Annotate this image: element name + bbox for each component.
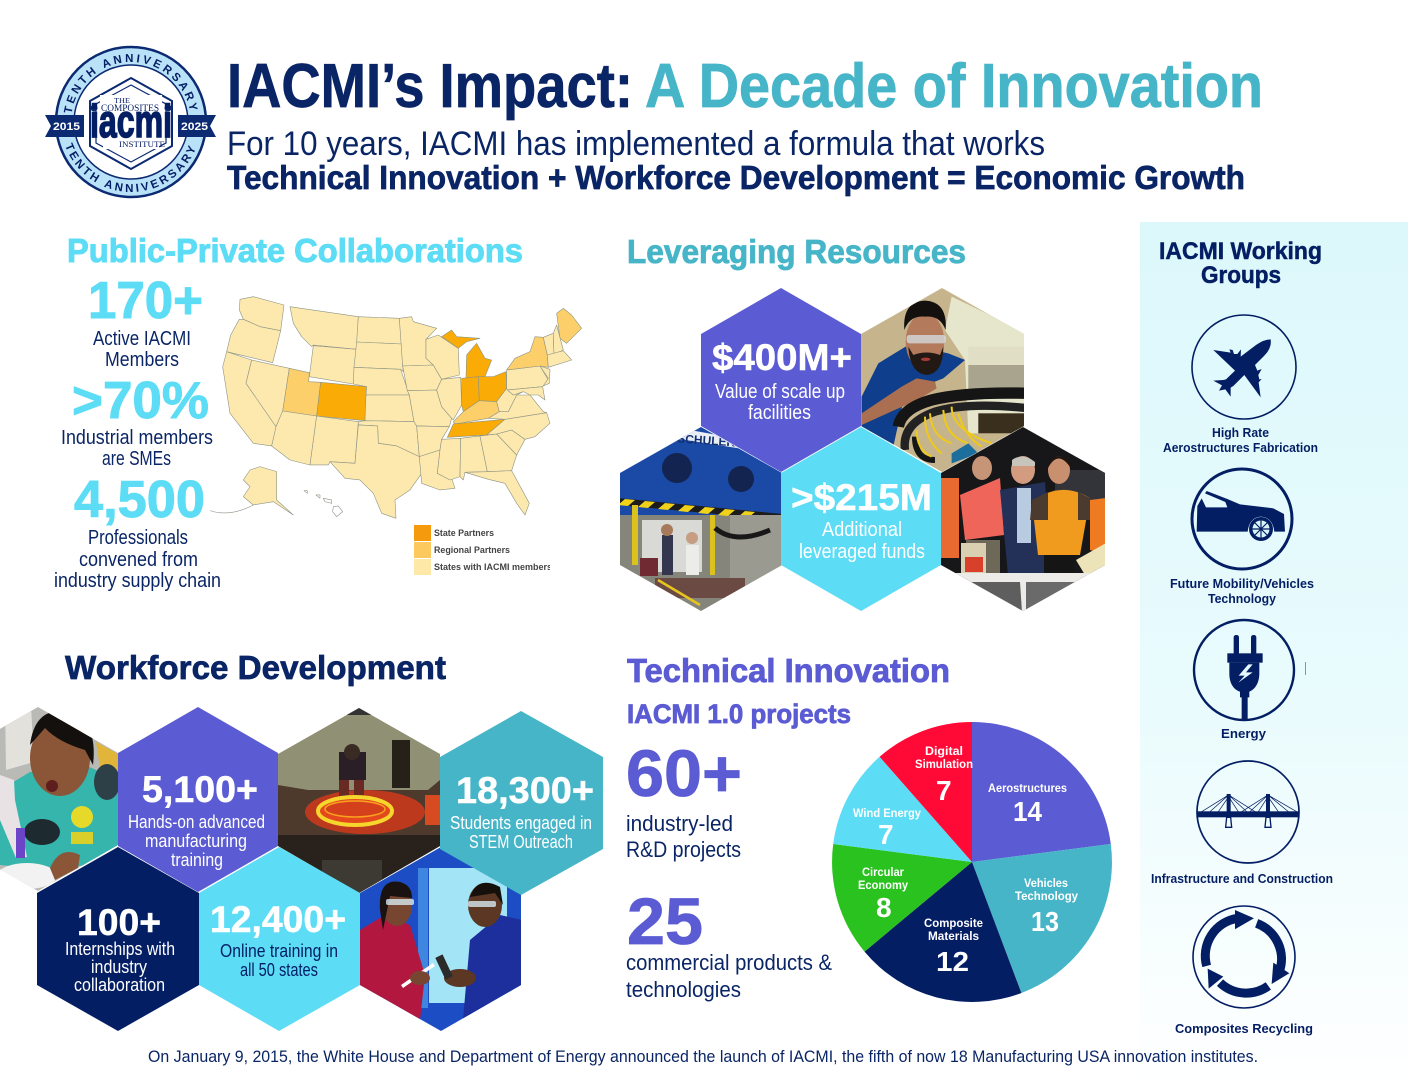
hexagon: 100+ internships: 100+ [77, 902, 161, 943]
stat: commercial products: commercial products & [626, 950, 832, 975]
logo: tenth anniversary badge: THE [114, 96, 130, 105]
title: IACMI’s Impact: [227, 52, 633, 121]
stat: active members: Members [105, 349, 179, 371]
pie chart: projects by area: Economy [858, 880, 909, 892]
hexagon: 12,400+ online training: Online training in [220, 941, 338, 961]
stat: R&D projects: 60+ [626, 736, 742, 810]
hexagon: 100+ internships: industry [91, 957, 147, 977]
hexagon: >$215M additional funds: >$215M [791, 477, 932, 518]
pie chart: projects by area: Digital [925, 746, 963, 758]
subtitle [227, 125, 1245, 196]
title [227, 52, 1263, 121]
hexagon: 12,400+ online training: 12,400+ [210, 899, 346, 940]
heading: Leveraging Resources [627, 233, 966, 270]
stat: active members: Active IACMI [93, 328, 191, 350]
map legend: States with IACMI members [434, 562, 552, 572]
map legend: State Partners [434, 528, 494, 538]
pie chart: projects by area: Vehicles [1024, 878, 1068, 890]
hexagon: 18,300+ STEM outreach [440, 711, 603, 895]
photo: press machine: SCHULER [677, 431, 736, 449]
logo: tenth anniversary badge: COMPOSITES [101, 103, 159, 113]
hexagon: 5,100+ hands-on training: 5,100+ [142, 769, 258, 810]
label: aerostructures [1163, 425, 1318, 455]
heading: IACMI Working [1159, 238, 1322, 265]
icon: bridge [1197, 761, 1299, 863]
title: A Decade of Innovation [645, 52, 1263, 121]
hexagon: 5,100+ hands-on training: training [171, 850, 223, 870]
hexagon: 18,300+ STEM outreach: STEM Outreach [469, 832, 573, 852]
panel: leveraging resources [618, 233, 1107, 613]
hexagon: 100+ internships: collaboration [74, 975, 165, 995]
footer note: On January 9, 2015, the White House and Department of Energy announced the launch of IACMI, the fifth of now 18 Manufacturing USA innovation institutes. [148, 1048, 1258, 1066]
pie chart: projects by area: Technology [1015, 891, 1079, 903]
pie chart: projects by area: Materials [928, 931, 979, 943]
stat: SMEs [61, 372, 213, 470]
pie chart: projects by area: 8 [876, 892, 892, 923]
subtitle: For 10 years, IACMI has implemented a formula that works [227, 125, 1045, 163]
photo: boy in science activity [0, 705, 120, 893]
hexagon: >$215M additional funds: Additional [822, 519, 902, 541]
hexagon: 5,100+ hands-on training: manufacturing [145, 831, 247, 851]
label: energy: Energy [1221, 726, 1267, 741]
pie chart: projects by area: 12 [936, 946, 969, 977]
pie chart: projects by area: Aerostructures [988, 783, 1067, 795]
heading: Public-Private Collaborations [67, 232, 523, 269]
stat: commercial products [626, 884, 832, 1002]
hexagon: $400M+ scale up facilities [701, 288, 861, 472]
photo: press machine [620, 427, 782, 611]
map of US partner states [210, 297, 582, 518]
label: mobility: Technology [1208, 591, 1277, 606]
hexagon: 18,300+ STEM outreach: Students engaged in [450, 813, 592, 833]
hexagon: 100+ internships: Internships with [65, 939, 175, 959]
stat: active members: 170+ [88, 272, 203, 330]
photo: glowing forged ring [276, 706, 442, 896]
hexagon: >$215M additional funds: leveraged funds [799, 541, 925, 563]
stat: professionals: industry supply chain [54, 570, 221, 592]
pie chart: projects by area: 7 [878, 819, 894, 850]
stat: professionals: Professionals [88, 527, 188, 549]
hexagon: $400M+ scale up facilities: Value of scale up [715, 381, 845, 403]
map legend [414, 525, 552, 575]
pie chart: projects by area: 7 [936, 775, 952, 806]
stat: SMEs: >70% [72, 372, 209, 430]
logo: tenth anniversary badge: TENTH ANNIVERSARY [64, 54, 198, 112]
panel: technical innovation [626, 652, 1112, 1002]
logo: tenth anniversary badge: INSTITUTE [119, 139, 165, 149]
panel: public-private collaborations [54, 232, 582, 592]
icon: airplane [1192, 315, 1296, 419]
label: mobility [1170, 576, 1314, 606]
photo: engineer with robot [858, 287, 1028, 473]
pie chart: projects by area: Simulation [915, 759, 973, 771]
pie chart: projects by area: Wind Energy [853, 808, 922, 820]
stat: R&D projects: R&D projects [626, 837, 741, 862]
heading: Workforce Development [65, 649, 446, 686]
label: mobility: Future Mobility/Vehicles [1170, 576, 1314, 591]
subtitle: Technical Innovation + Workforce Development = Economic Growth [227, 159, 1245, 196]
stat: commercial products: technologies [626, 977, 741, 1002]
photo: students in lab [358, 845, 523, 1033]
stat: active members [88, 272, 203, 371]
stat: R&D projects: industry-led [626, 811, 733, 836]
panel: workforce development [0, 649, 603, 1033]
hexagon: >$215M additional funds [781, 427, 941, 611]
logo: tenth anniversary badge [45, 46, 216, 198]
pie chart: projects by area: 13 [1031, 906, 1059, 937]
sidebar background [1140, 222, 1408, 1088]
stat: commercial products: 25 [627, 884, 703, 958]
heading: Technical Innovation [627, 652, 950, 689]
heading [1159, 238, 1322, 289]
pie chart: projects by area [832, 722, 1112, 1002]
label: infrastructure: Infrastructure and Construction [1151, 871, 1333, 886]
logo: tenth anniversary badge: 2015 [53, 121, 80, 133]
hexagon: 5,100+ hands-on training: Hands-on advanced [128, 812, 265, 832]
map legend: Regional Partners [434, 545, 510, 555]
hexagon: 12,400+ online training [199, 847, 360, 1031]
icon: plug [1194, 620, 1306, 720]
icon: recycling arrows [1193, 906, 1295, 1008]
hexagon: 18,300+ STEM outreach: 18,300+ [456, 770, 594, 811]
stat: SMEs: Industrial members [61, 427, 213, 449]
logo: tenth anniversary badge: iacmi [90, 95, 172, 147]
stat: R&D projects [626, 736, 742, 862]
stat: SMEs: are SMEs [102, 448, 171, 470]
panel: IACMI working groups [1151, 238, 1333, 1036]
subheading: IACMI 1.0 projects [627, 699, 851, 729]
pie chart: projects by area: Composite [924, 918, 983, 930]
hexagon: $400M+ scale up facilities: $400M+ [712, 337, 852, 378]
icon: car [1192, 469, 1292, 569]
hexagon: 100+ internships [37, 847, 199, 1031]
label: aerostructures: High Rate [1212, 425, 1269, 440]
logo: tenth anniversary badge: TENTH ANNIVERSARY [66, 142, 195, 192]
stat: professionals [54, 471, 221, 592]
pie chart: projects by area: Circular [862, 867, 905, 879]
pie chart: projects by area: 14 [1013, 796, 1042, 827]
hexagon: $400M+ scale up facilities: facilities [748, 402, 811, 424]
label: recycling: Composites Recycling [1175, 1021, 1313, 1036]
hexagon: 12,400+ online training: all 50 states [240, 960, 318, 980]
label: aerostructures: Aerostructures Fabrication [1163, 440, 1318, 455]
heading: Groups [1201, 262, 1281, 289]
logo: tenth anniversary badge: 2025 [181, 121, 208, 133]
photo: team at booth [940, 425, 1107, 613]
hexagon: 5,100+ hands-on training [118, 707, 278, 892]
stat: professionals: convened from [79, 549, 198, 571]
stat: professionals: 4,500 [74, 471, 205, 529]
